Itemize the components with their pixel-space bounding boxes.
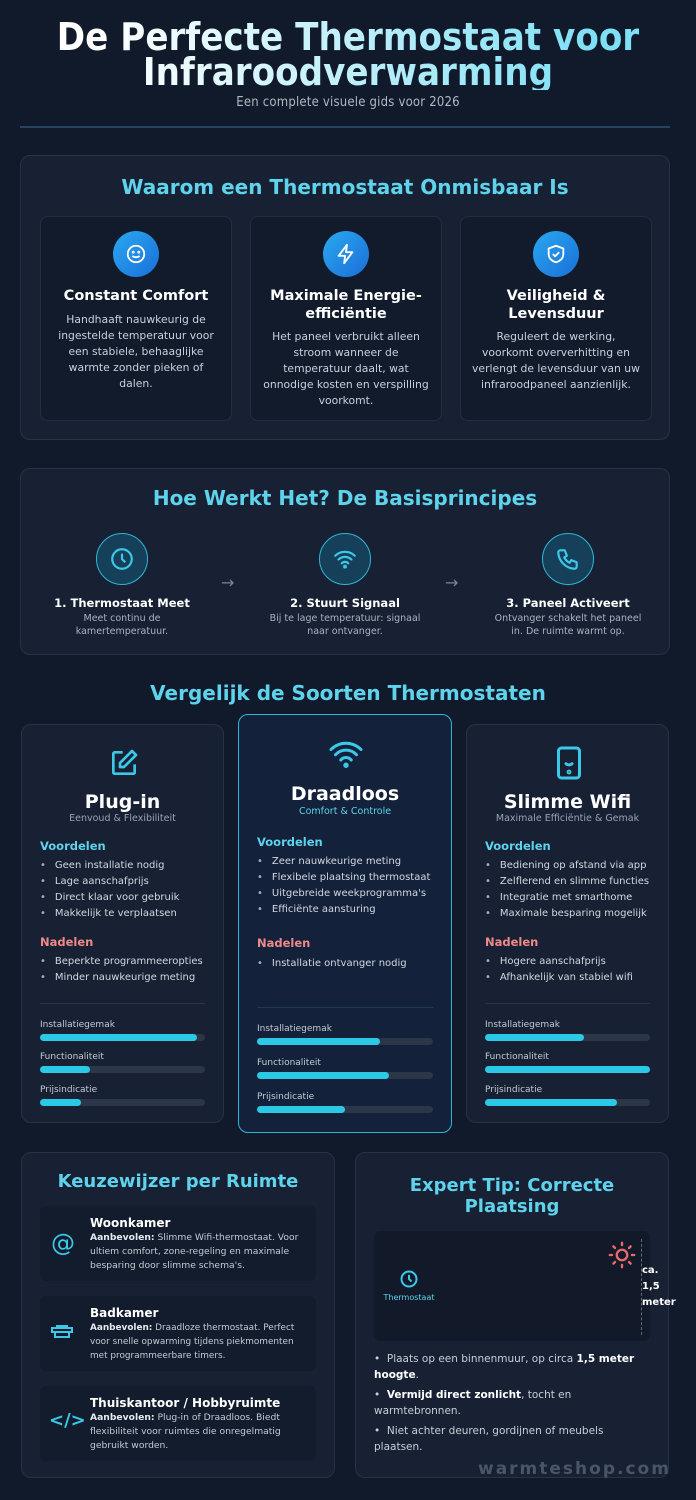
step 3: in. De ruimte warmt op. xyxy=(511,626,625,637)
tips list: • Plaats op een binnenmuur, op circa 1,5 meter hoogte. xyxy=(374,1353,634,1381)
card: comfort: warmte zonder pieken of xyxy=(69,361,203,374)
icon: thermostaat xyxy=(383,1270,434,1302)
icon: smile xyxy=(113,231,159,277)
card: safety: Veiligheid & xyxy=(507,288,605,304)
card: energy: stroom wanneer de xyxy=(293,346,398,359)
heading: compare: Vergelijk de Soorten Thermostaten xyxy=(150,681,546,705)
card: slimme wifi: Zelflerend en slimme functies xyxy=(500,876,649,887)
card: plug-in: Plug-in xyxy=(85,791,160,813)
room: woonkamer xyxy=(40,1206,316,1281)
step 2: 2. Stuurt Signaal xyxy=(290,596,400,610)
card: slimme wifi: Hogere aanschafprijs xyxy=(500,956,606,967)
card: energy: voorkomt. xyxy=(319,394,373,407)
card: energy: Het paneel verbruikt alleen xyxy=(272,330,420,343)
card: slimme wifi: Voordelen xyxy=(485,839,551,853)
card: slimme wifi: Afhankelijk van stabiel wifi xyxy=(500,972,633,983)
tips list: • Niet achter deuren, gordijnen of meubels plaatsen. xyxy=(374,1425,603,1453)
room: woonkamer: Woonkamer xyxy=(90,1216,170,1230)
card: safety: infraroodpaneel aanzienlijk. xyxy=(481,378,631,391)
card: draadloos: Prijsindicatie xyxy=(257,1092,314,1102)
card: safety xyxy=(460,216,652,421)
card: slimme wifi: Integratie met smarthome xyxy=(500,892,632,903)
title xyxy=(0,20,696,90)
room: badkamer: Badkamer xyxy=(90,1306,158,1320)
card: plug-in: Installatiegemak xyxy=(40,1020,115,1030)
room: thuiskantoor xyxy=(40,1386,316,1461)
card: energy: temperatuur daalt, wat xyxy=(283,362,409,375)
heading: tip: Expert Tip: Correcte xyxy=(410,1175,614,1196)
card: plug-in: Prijsindicatie xyxy=(40,1085,97,1095)
card: plug-in: Voordelen xyxy=(40,839,106,853)
card: energy xyxy=(250,216,442,421)
card: draadloos: Voordelen xyxy=(257,835,323,849)
icon: shield xyxy=(533,231,579,277)
icon: bolt xyxy=(323,231,369,277)
heading: tip xyxy=(410,1175,614,1217)
card: comfort: dalen. xyxy=(119,377,153,390)
step 1 xyxy=(54,533,190,637)
tips list xyxy=(374,1353,634,1453)
card: plug-in: Functionaliteit xyxy=(40,1052,104,1062)
card: plug-in: Beperkte programmeeropties xyxy=(55,956,203,967)
card: energy: efficiëntie xyxy=(305,306,387,322)
card: draadloos xyxy=(238,714,452,1133)
step 2 xyxy=(270,533,420,637)
card: draadloos: Uitgebreide weekprogramma's xyxy=(272,888,426,899)
title: Infraroodverwarming xyxy=(143,50,553,94)
step 1: Meet continu de xyxy=(84,613,160,624)
room: woonkamer: Aanbevolen: Slimme Wifi-thermostaat. Voor ultiem comfort, zone-regeling en maximale besparing door slimme schema's. xyxy=(90,1232,298,1271)
card: slimme wifi xyxy=(466,724,669,1123)
step 2: Bij te lage temperatuur: signaal xyxy=(270,613,420,624)
icon: edit xyxy=(112,750,138,775)
card: plug-in: Eenvoud & Flexibiliteit xyxy=(69,813,176,824)
step 2: naar ontvanger. xyxy=(307,626,383,637)
label: height: ca. xyxy=(642,1265,658,1276)
arrow: → xyxy=(221,573,234,592)
room: badkamer: Aanbevolen: Draadloze thermostaat. Perfect voor snelle opwarming tijdens piekmomenten met programmeerbare timers. xyxy=(90,1323,294,1361)
card: draadloos: Flexibele plaatsing thermostaat xyxy=(272,872,430,883)
panel: expert tip xyxy=(355,1152,669,1478)
subtitle: Een complete visuele gids voor 2026 xyxy=(236,95,460,110)
step 3: 3. Paneel Activeert xyxy=(506,596,630,610)
card: draadloos: Zeer nauwkeurige meting xyxy=(272,856,401,867)
card: plug-in: Lage aanschafprijs xyxy=(55,876,149,887)
heading: tip: Plaatsing xyxy=(465,1196,559,1217)
icon: wifi xyxy=(329,742,363,768)
card: comfort: Handhaaft nauwkeurig de xyxy=(66,313,206,326)
step 3 xyxy=(495,533,641,637)
card: comfort: ingestelde temperatuur voor xyxy=(58,329,214,342)
card: slimme wifi: Nadelen xyxy=(485,935,538,949)
room: thuiskantoor: Thuiskantoor / Hobbyruimte xyxy=(90,1396,280,1410)
card: safety: verlengt de levensduur van uw xyxy=(472,362,640,375)
watermark: warmteshop.com xyxy=(478,1459,671,1479)
card: slimme wifi: Installatiegemak xyxy=(485,1020,560,1030)
card: energy: onnodige kosten en verspilling xyxy=(263,378,429,391)
card: draadloos: Nadelen xyxy=(257,936,310,950)
card: slimme wifi: Prijsindicatie xyxy=(485,1085,542,1095)
room: woonkamer: @ xyxy=(51,1229,75,1257)
card: energy: Maximale Energie- xyxy=(270,288,422,304)
card: safety: Levensduur xyxy=(508,306,604,322)
icon: phone xyxy=(557,746,581,780)
card: slimme wifi: Maximale Efficiëntie & Gemak xyxy=(496,813,639,824)
diagram: wall placement xyxy=(374,1231,650,1341)
card: slimme wifi: Functionaliteit xyxy=(485,1052,549,1062)
card: plug-in: Direct klaar voor gebruik xyxy=(55,892,179,903)
panel: why xyxy=(20,155,670,440)
card: slimme wifi: Slimme Wifi xyxy=(504,791,631,813)
step 1: 1. Thermostaat Meet xyxy=(54,596,190,610)
card: plug-in: Minder nauwkeurige meting xyxy=(55,972,195,983)
card: draadloos: Comfort & Controle xyxy=(299,806,391,817)
card: draadloos: Draadloos xyxy=(291,783,399,805)
label: height: meter xyxy=(642,1297,676,1308)
tips list: • Vermijd direct zonlicht, tocht en warmtebronnen. xyxy=(374,1389,571,1417)
arrow: → xyxy=(445,573,458,592)
label: height xyxy=(642,1265,676,1308)
icon: thermostaat: Thermostaat xyxy=(384,1293,434,1302)
heading: why: Waarom een Thermostaat Onmisbaar Is xyxy=(121,175,569,199)
card: plug-in: Nadelen xyxy=(40,935,93,949)
room: badkamer xyxy=(40,1296,316,1371)
card: comfort: een stabiele, behaaglijke xyxy=(68,345,203,358)
card: comfort: Constant Comfort xyxy=(64,288,208,304)
title: De Perfecte Thermostaat voor xyxy=(57,15,639,59)
card: slimme wifi: Maximale besparing mogelijk xyxy=(500,908,647,919)
card: plug-in: Makkelijk te verplaatsen xyxy=(55,908,177,919)
card: draadloos: Installatie ontvanger nodig xyxy=(272,958,407,969)
room: thuiskantoor: Aanbevolen: Plug-in of Draadloos. Biedt flexibiliteit voor ruimtes die onregelmatig gebruikt worden. xyxy=(90,1412,281,1451)
card: plug-in xyxy=(21,724,224,1123)
step 3: Ontvanger schakelt het paneel xyxy=(495,613,641,624)
card: draadloos: Installatiegemak xyxy=(257,1024,332,1034)
icon: sun xyxy=(608,1242,636,1268)
card: plug-in: Geen installatie nodig xyxy=(55,860,164,871)
card: draadloos: Efficiënte aansturing xyxy=(272,904,376,915)
card: safety: voorkomt oververhitting en xyxy=(482,346,630,359)
card: safety: Reguleert de werking, xyxy=(497,330,615,343)
heading: rooms: Keuzewijzer per Ruimte xyxy=(58,1171,298,1192)
card: slimme wifi: Bediening op afstand via app xyxy=(500,860,646,871)
label: height: 1,5 xyxy=(642,1281,660,1292)
step 1: kamertemperatuur. xyxy=(76,626,168,637)
heading: how: Hoe Werkt Het? De Basisprincipes xyxy=(153,486,537,510)
room: thuiskantoor: </> xyxy=(49,1410,86,1431)
panel: how it works xyxy=(20,468,670,655)
card: draadloos: Functionaliteit xyxy=(257,1058,321,1068)
panel: rooms xyxy=(21,1152,335,1478)
card: comfort xyxy=(40,216,232,421)
